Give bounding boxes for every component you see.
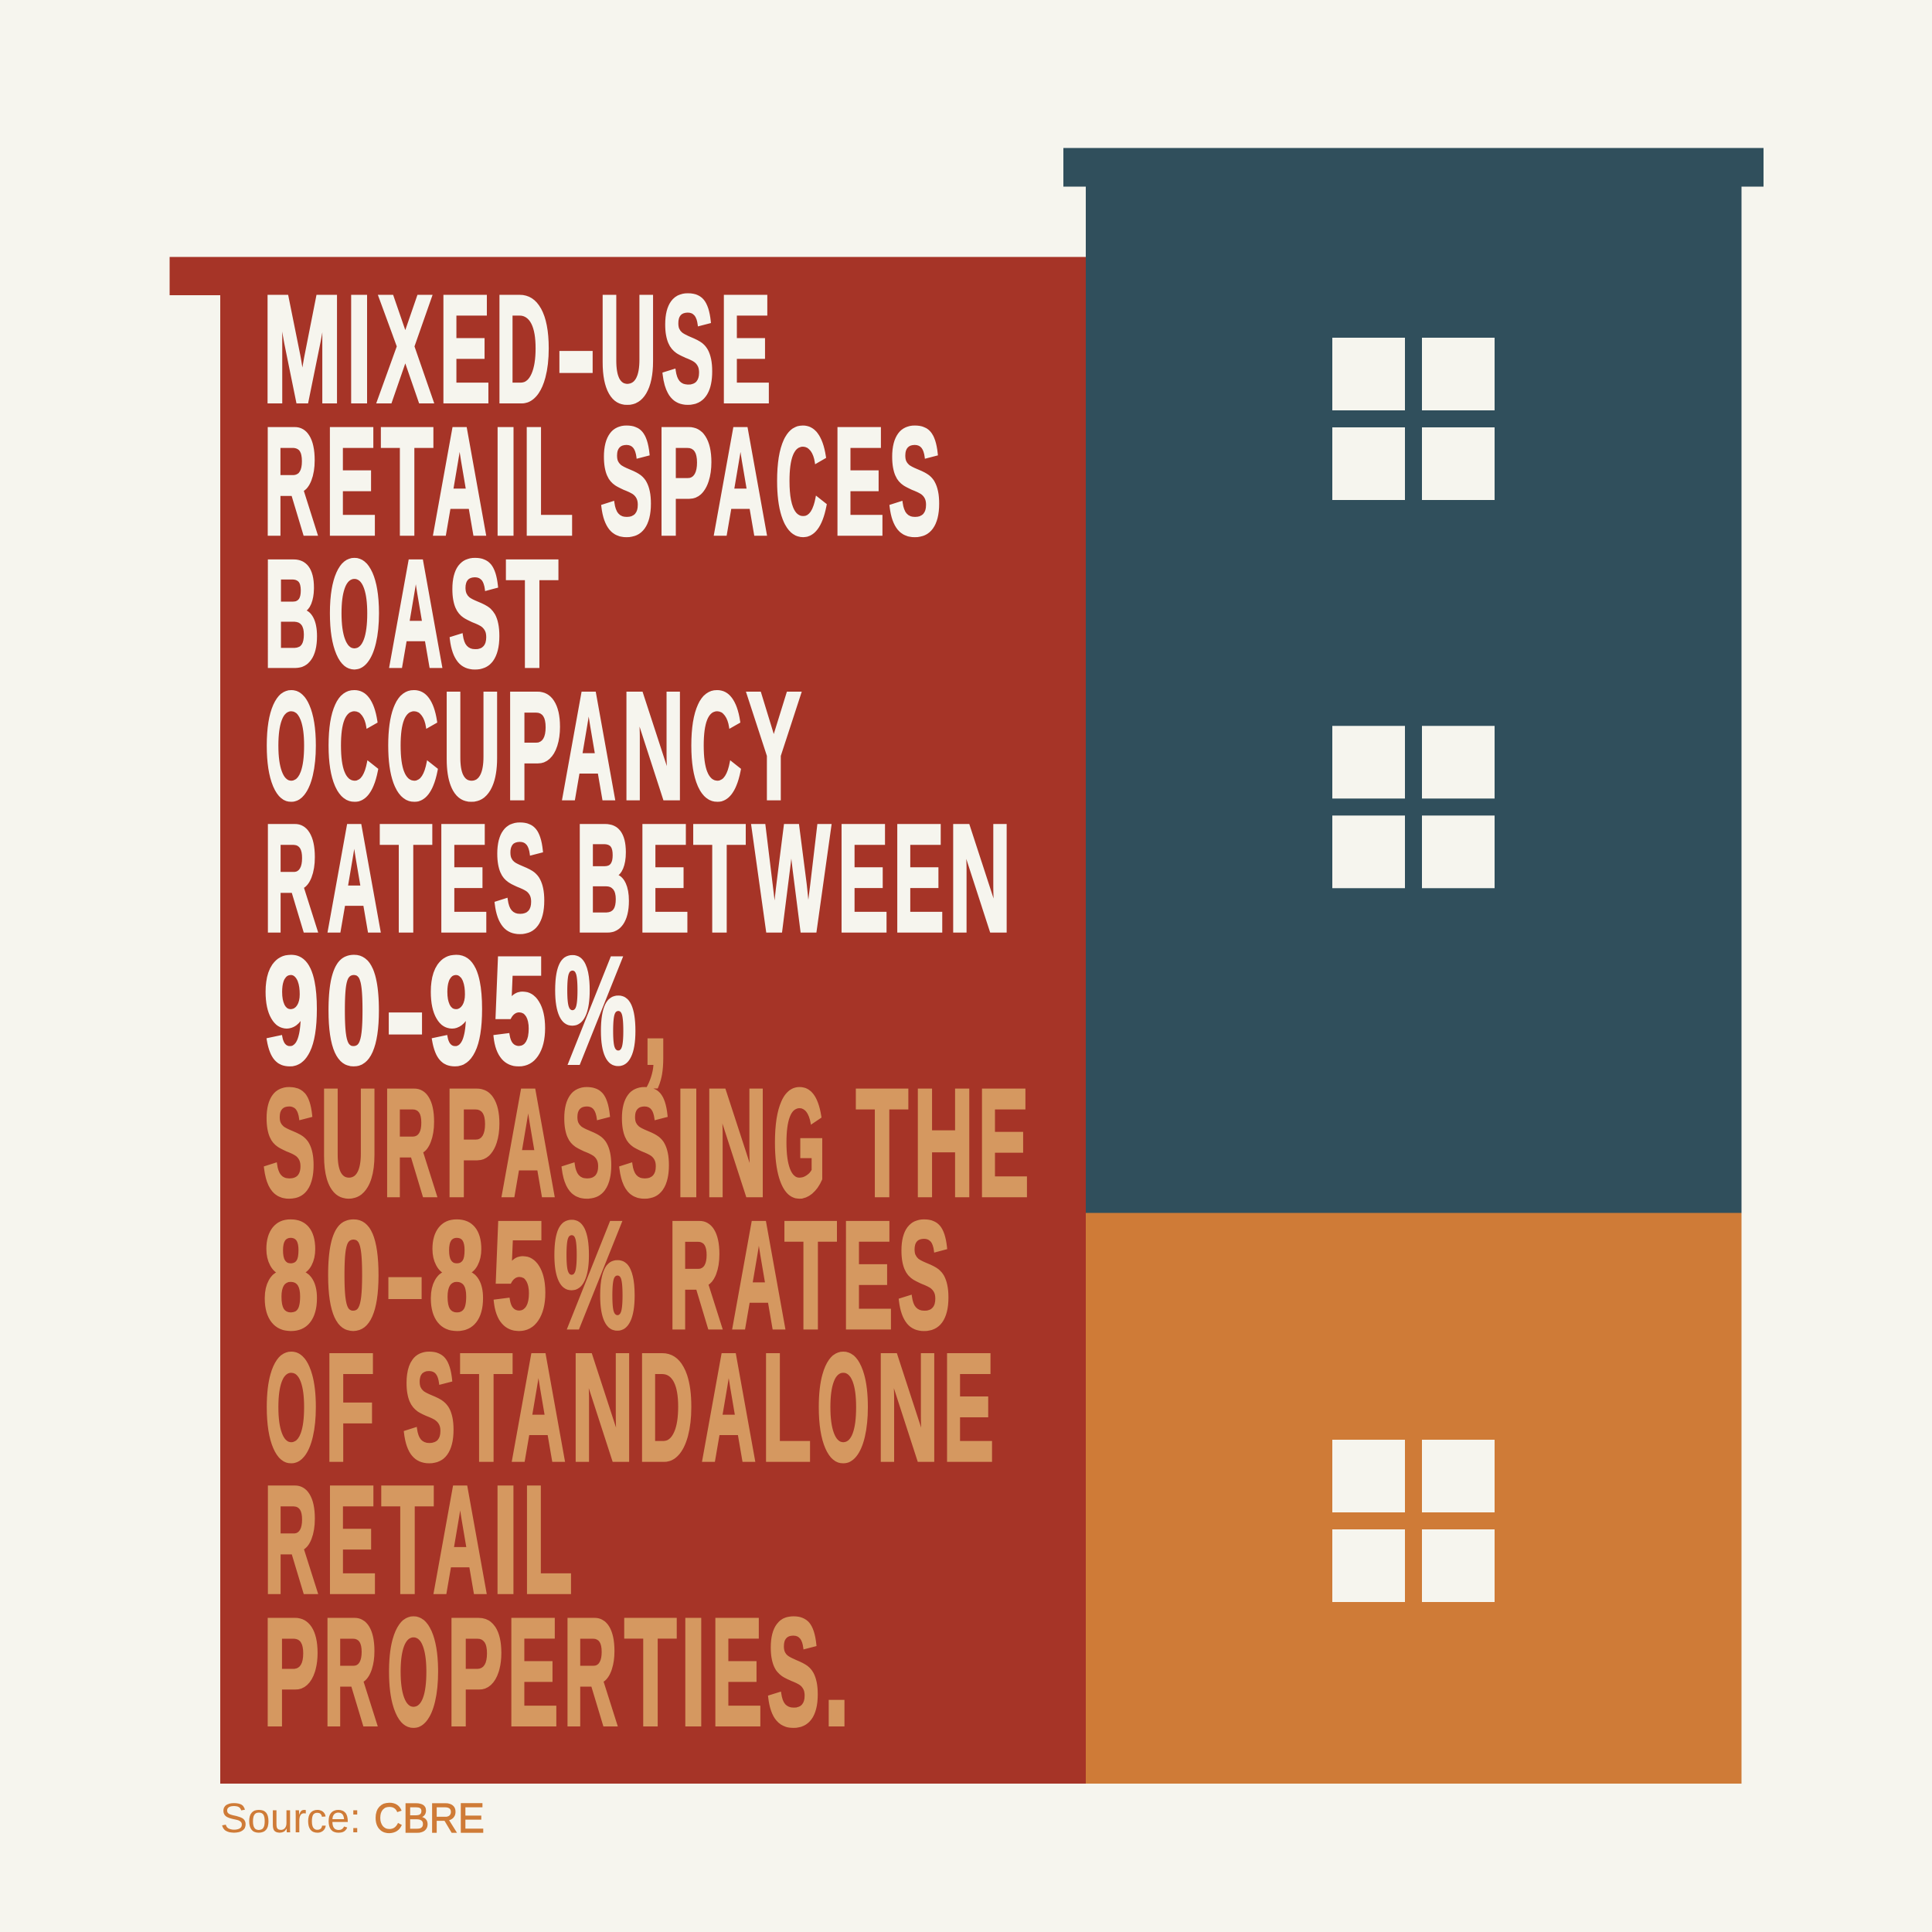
heading: tan statement: S	[767, 1587, 820, 1757]
heading: tan statement: .	[824, 1587, 850, 1757]
heading: white statement: A	[389, 529, 443, 699]
heading: white statement: A	[327, 793, 382, 963]
heading: tan statement: E	[507, 1587, 558, 1757]
heading: white statement: I	[492, 396, 519, 566]
heading: white statement: R	[264, 793, 318, 963]
heading: white statement: E	[437, 793, 488, 963]
heading: white statement: ,	[642, 926, 668, 1096]
heading: white statement: C	[326, 661, 379, 831]
heading: white statement: E	[638, 793, 689, 963]
heading: tan statement: D	[638, 1322, 694, 1492]
heading: white statement: N	[948, 793, 1012, 963]
heading: tan statement: L	[762, 1322, 811, 1492]
heading: white statement: T	[381, 396, 434, 566]
heading: tan statement: 8	[429, 1190, 485, 1360]
heading: white statement: E	[838, 793, 889, 963]
heading: white statement: P	[505, 661, 562, 831]
heading: tan statement: O	[387, 1587, 440, 1757]
heading: tan statement: A	[501, 1058, 556, 1228]
panel: orange ground floor	[1086, 1213, 1742, 1784]
heading: white statement: X	[377, 264, 433, 434]
heading: tan statement: P	[263, 1587, 319, 1757]
heading: white statement: U	[599, 264, 657, 434]
heading: tan statement: T	[382, 1454, 434, 1624]
heading: tan statement: L	[522, 1454, 573, 1624]
heading: tan statement: N	[705, 1058, 767, 1228]
heading: white statement: 9	[429, 926, 485, 1096]
heading: tan statement: H	[913, 1058, 974, 1228]
heading: white statement: E	[326, 396, 377, 566]
heading: white statement: A	[713, 396, 767, 566]
heading: tan statement: E	[711, 1587, 762, 1757]
heading: tan statement: E	[943, 1322, 994, 1492]
heading: white statement: -	[556, 264, 596, 434]
heading: white statement: Y	[747, 661, 801, 831]
heading: tan statement: T	[784, 1190, 837, 1360]
heading: tan statement: -	[385, 1190, 425, 1360]
heading: tan statement: S	[618, 1058, 671, 1228]
heading: white statement: I	[346, 264, 372, 434]
heading: tan statement: S	[403, 1322, 456, 1492]
heading: tan statement: P	[445, 1058, 502, 1228]
heading: tan statement: R	[323, 1587, 378, 1757]
heading: white statement: A	[561, 661, 616, 831]
heading: tan statement: A	[732, 1190, 786, 1360]
heading: white statement: C	[775, 396, 828, 566]
heading: tan statement: I	[680, 1587, 706, 1757]
heading: tan statement: 5	[492, 1190, 547, 1360]
heading: tan statement: A	[702, 1322, 756, 1492]
heading: tan statement: R	[563, 1587, 617, 1757]
heading: white statement: O	[328, 529, 381, 699]
heading: white statement: O	[265, 661, 318, 831]
heading: white statement: B	[264, 529, 320, 699]
heading: tan statement: R	[264, 1454, 318, 1624]
heading: tan statement: G	[773, 1058, 825, 1228]
heading: white statement: W	[753, 793, 831, 963]
icon: window middle	[1332, 726, 1495, 888]
icon: window bottom	[1332, 1440, 1495, 1602]
panel: navy upper building	[1063, 148, 1764, 1213]
heading: tan statement: %	[553, 1190, 636, 1360]
heading: white statement: R	[264, 396, 318, 566]
heading: tan statement: I	[492, 1454, 519, 1624]
heading: white statement: L	[522, 396, 572, 566]
heading: tan statement: 0	[325, 1190, 382, 1360]
heading: white statement: M	[263, 264, 342, 434]
heading: tan statement: P	[447, 1587, 503, 1757]
heading: white statement: E	[893, 793, 944, 963]
heading: white statement: B	[576, 793, 631, 963]
heading: tan statement: E	[326, 1454, 377, 1624]
heading: white statement: S	[493, 793, 546, 963]
heading: tan statement: N	[571, 1322, 634, 1492]
heading: white statement: E	[439, 264, 491, 434]
heading: tan statement: E	[842, 1190, 893, 1360]
heading: tan statement: S	[560, 1058, 614, 1228]
heading: tan statement	[263, 1058, 1029, 1757]
heading: white statement: C	[386, 661, 439, 831]
heading: white statement: S	[662, 264, 714, 434]
heading: white statement: S	[600, 396, 653, 566]
heading: tan statement: T	[461, 1322, 512, 1492]
heading: white statement: E	[833, 396, 884, 566]
source note: Source:	[220, 1795, 361, 1842]
heading: white statement: N	[621, 661, 685, 831]
heading: tan statement: O	[817, 1322, 870, 1492]
heading: tan statement: 8	[263, 1190, 318, 1360]
heading: white statement: 9	[264, 926, 319, 1096]
heading: tan statement: T	[624, 1587, 677, 1757]
heading: tan statement: I	[675, 1058, 702, 1228]
heading: white statement: S	[448, 529, 502, 699]
heading: white statement: E	[719, 264, 771, 434]
heading: tan statement: T	[856, 1058, 908, 1228]
heading: tan statement: U	[320, 1058, 379, 1228]
icon: window top	[1332, 338, 1495, 500]
source note: CBRE	[374, 1795, 485, 1842]
heading: white statement: C	[689, 661, 742, 831]
panel: red building	[170, 257, 1086, 1784]
heading: white statement	[263, 264, 1012, 1096]
heading: white statement: U	[443, 661, 501, 831]
heading: tan statement: S	[263, 1058, 315, 1228]
heading: tan statement: N	[876, 1322, 939, 1492]
heading: white statement: %	[554, 926, 637, 1096]
heading: white statement: T	[380, 793, 432, 963]
heading: tan statement: S	[898, 1190, 951, 1360]
heading: white statement: A	[433, 396, 487, 566]
heading: tan statement: O	[265, 1322, 318, 1492]
heading: white statement: 0	[326, 926, 382, 1096]
heading: tan statement: A	[433, 1454, 488, 1624]
heading: white statement: D	[495, 264, 551, 434]
heading: white statement: P	[657, 396, 713, 566]
heading: white statement: -	[386, 926, 425, 1096]
heading: white statement: 5	[492, 926, 546, 1096]
heading: white statement: S	[889, 396, 941, 566]
heading: tan statement: R	[383, 1058, 437, 1228]
heading: tan statement: A	[512, 1322, 566, 1492]
heading: white statement: T	[506, 529, 558, 699]
heading: tan statement: F	[325, 1322, 375, 1492]
heading: white statement: T	[693, 793, 746, 963]
heading: tan statement: R	[668, 1190, 723, 1360]
heading: tan statement: E	[978, 1058, 1029, 1228]
